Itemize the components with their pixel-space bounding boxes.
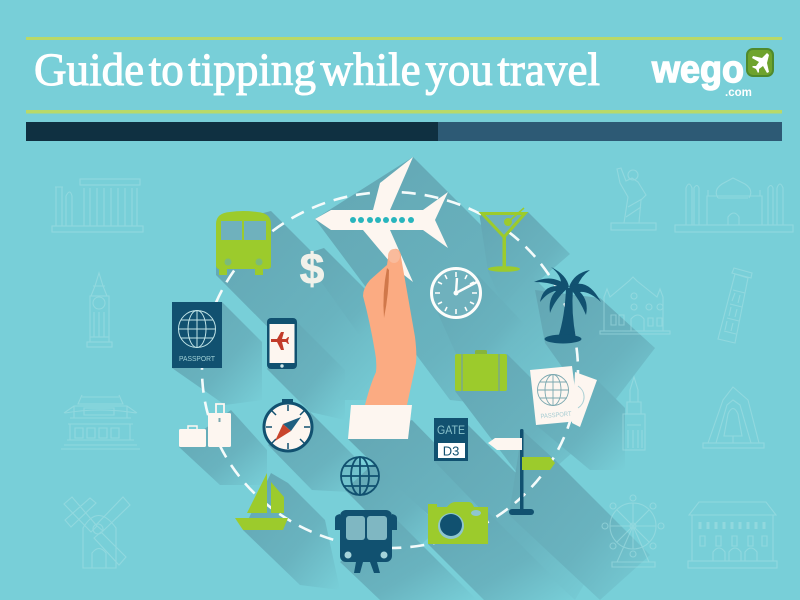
icon: bus [216, 211, 271, 275]
shirt cuff [348, 405, 412, 439]
landmark: big ben [87, 273, 112, 347]
icon: signpost [488, 429, 555, 515]
logo badge [747, 49, 773, 76]
icon: train [335, 510, 397, 573]
landmark: parthenon [52, 179, 143, 232]
logo wordmark: wego [651, 49, 744, 91]
icon: sailboat [235, 473, 288, 530]
logo: wego [651, 49, 773, 99]
icon: clock [432, 268, 480, 318]
icon: dollar sign: $ [300, 245, 324, 294]
long shadows [172, 157, 655, 600]
landmark: taj mahal [675, 178, 793, 232]
icon: passport [172, 302, 222, 368]
header bar: blue segment [438, 122, 782, 141]
icon: passport: PASSPORT [179, 356, 216, 363]
landmark: windmill [64, 497, 130, 568]
header: bottom rule [26, 110, 782, 114]
icon: globe [341, 457, 379, 495]
icon: camera [428, 502, 488, 544]
dashed flight path ring [202, 192, 578, 548]
header bar: dark segment [26, 122, 438, 141]
background landmarks [52, 168, 793, 568]
landmark: bell arch [703, 387, 764, 448]
landmark: clock tower [623, 377, 645, 450]
icon: palm tree [534, 267, 601, 344]
icon: airplane [315, 157, 448, 282]
icon: martini glass [482, 208, 525, 272]
header: top rule [26, 37, 782, 40]
logo domain: .com [725, 87, 752, 99]
icon: gate sign: GATE [437, 425, 465, 437]
icon: white passports [530, 366, 597, 427]
title: Guide to tipping while you travel [34, 44, 600, 96]
icon: green suitcase [455, 350, 507, 391]
icon: compass [264, 399, 312, 451]
icon: luggage [179, 404, 231, 447]
icon: smartphone [267, 318, 297, 369]
icon: gate sign [434, 418, 468, 461]
landmark: palace [688, 502, 777, 568]
landmark: milan cathedral [600, 277, 670, 334]
icon: gate sign: D3 [443, 444, 459, 458]
landmark: statue of liberty [611, 168, 656, 230]
landmark: pagoda [61, 395, 140, 449]
landmark: ferris wheel [602, 495, 664, 567]
landmark: leaning tower of pisa [718, 268, 752, 343]
icon: hand holding plane [348, 249, 416, 439]
icon: white passports: PASSPORT [540, 411, 572, 420]
